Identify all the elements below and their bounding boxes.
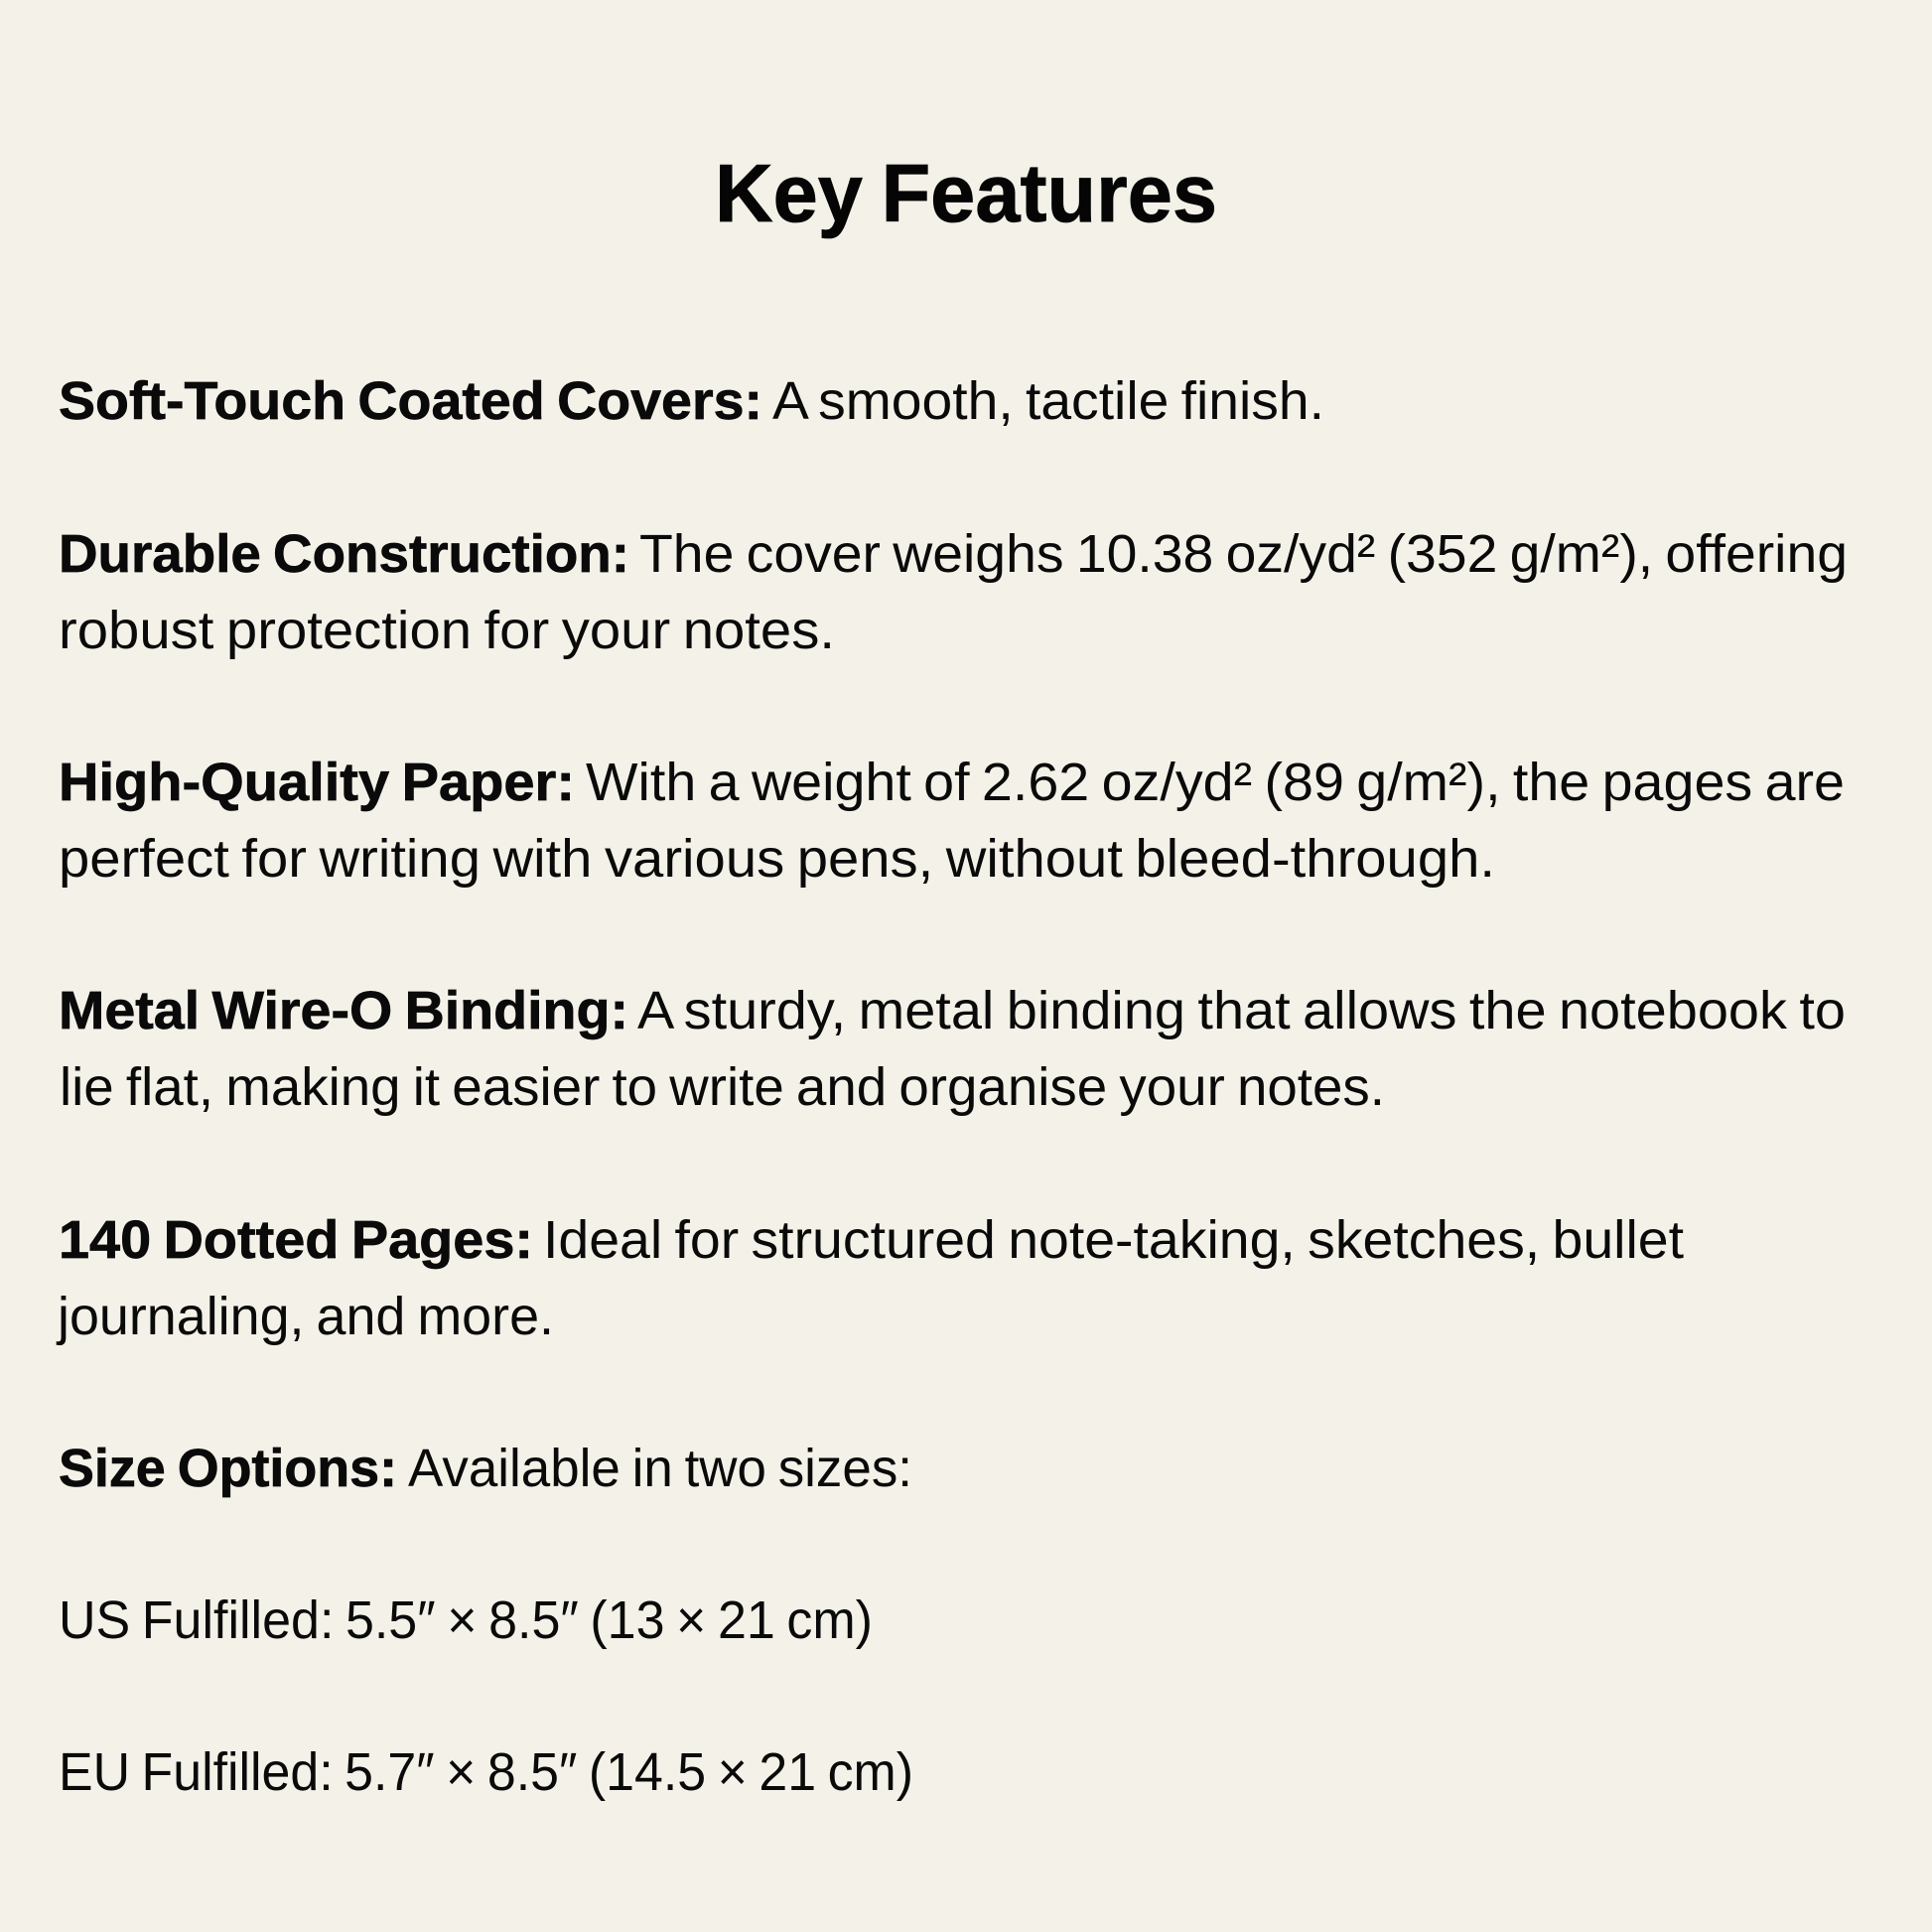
feature: size options: Size Options:: [59, 1439, 397, 1498]
feature: durable construction: [59, 524, 1848, 660]
feature: durable construction: Durable Construction:: [59, 524, 629, 584]
feature: high-quality paper: With a weight of 2.62 oz/yd² (89 g/m²), the pages are: [586, 753, 1845, 812]
feature: high-quality paper: [59, 753, 1845, 889]
feature: soft-touch coated covers: A smooth, tactile finish.: [772, 371, 1324, 431]
feature: durable construction: robust protection for your notes.: [59, 601, 835, 660]
size: US fulfilled: US Fulfilled: 5.5″ × 8.5″ (13 × 21 cm): [59, 1590, 873, 1650]
feature: high-quality paper: High-Quality Paper:: [59, 753, 575, 812]
feature: 140 dotted pages: 140 Dotted Pages:: [59, 1210, 533, 1270]
feature: metal wire-o binding: A sturdy, metal binding that allows the notebook to: [637, 981, 1846, 1040]
feature: durable construction: The cover weighs 10.38 oz/yd² (352 g/m²), offering: [639, 524, 1848, 584]
feature: high-quality paper: perfect for writing with various pens, without bleed-through.: [59, 829, 1495, 889]
feature: size options: [59, 1439, 912, 1498]
size: EU fulfilled: EU Fulfilled: 5.7″ × 8.5″ (14.5 × 21 cm): [59, 1742, 913, 1802]
feature: metal wire-o binding: [59, 981, 1846, 1117]
feature: metal wire-o binding: Metal Wire-O Binding:: [59, 981, 628, 1040]
feature: soft-touch coated covers: [59, 371, 1324, 431]
feature: size options: Available in two sizes:: [408, 1439, 912, 1498]
feature: 140 dotted pages: Ideal for structured note-taking, sketches, bullet: [543, 1210, 1684, 1270]
title: Key Features: [715, 147, 1217, 239]
feature: 140 dotted pages: journaling, and more.: [56, 1287, 554, 1346]
feature: metal wire-o binding: lie flat, making it easier to write and organise your notes.: [60, 1057, 1385, 1117]
feature: soft-touch coated covers: Soft-Touch Coated Covers:: [59, 371, 762, 431]
feature: 140 dotted pages: [56, 1210, 1684, 1346]
